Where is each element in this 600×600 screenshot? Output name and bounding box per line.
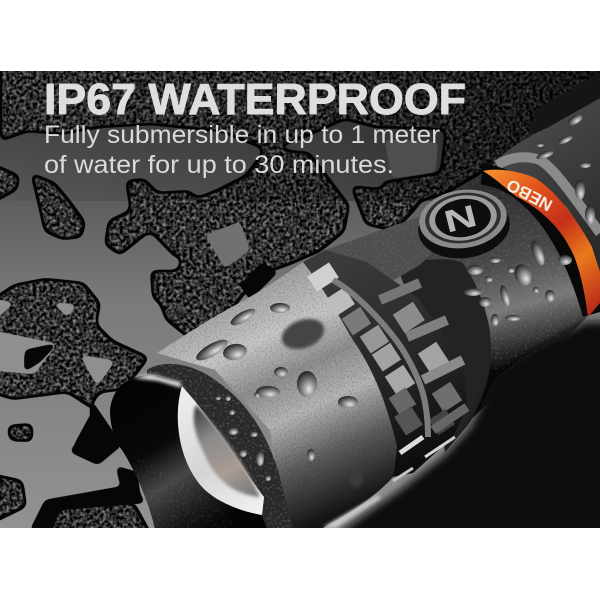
dark collar behind ribs: [395, 259, 491, 452]
power button: [414, 184, 514, 264]
puddle: top expanse: [0, 60, 600, 205]
raised grip bars: [380, 283, 467, 481]
button outer ring: [415, 184, 511, 254]
lower body reflection: [323, 495, 381, 528]
lens: [178, 386, 264, 515]
rib base: [303, 250, 467, 477]
rear tube metal band: [497, 157, 600, 233]
flashlight mid body: [420, 174, 587, 418]
puddle: bottom strip: [53, 504, 149, 528]
flashlight hood: [110, 375, 268, 530]
title: IP67 WATERPROOF: [44, 75, 466, 124]
photo panel: [0, 60, 600, 540]
dark puddle shadows: [24, 262, 278, 535]
flashlight main body: [157, 262, 397, 528]
puddle: bottom left fleck: [0, 474, 26, 520]
button logo: N: [441, 199, 481, 240]
rear tube ridge: [528, 72, 600, 135]
water droplets on flashlight: [193, 113, 595, 487]
darkening over the upper puddle: [0, 71, 600, 201]
puddle: small left fleck: [7, 423, 33, 442]
puddle: cross shape: [104, 178, 214, 258]
water puddles: [0, 60, 600, 540]
shoulder grain: [326, 218, 430, 279]
band glow: [483, 170, 600, 317]
ribbed focus collar: [303, 250, 467, 481]
subtitle: [44, 121, 440, 179]
subtitle line 2: of water for up to 30 minutes.: [44, 151, 394, 179]
button shadow: [414, 190, 514, 264]
dark lower right shadow: [335, 322, 600, 535]
bezel bright rim: [133, 374, 182, 388]
hood grain: [133, 458, 235, 528]
surface islands in puddles: [0, 140, 438, 386]
button metal ring: [422, 188, 504, 248]
button face: [433, 195, 493, 241]
orange NEBO band: [482, 170, 600, 317]
button light ring: [426, 191, 500, 245]
lens inner reflection: [194, 405, 260, 497]
wet surface background: [0, 121, 600, 528]
flashlight rear tube: [492, 72, 600, 272]
main body grain: [157, 262, 397, 528]
mid body grain: [428, 174, 584, 374]
puddle: oval above head: [150, 270, 232, 310]
subtitle line 1: Fully submersible in up to 1 meter: [44, 121, 440, 149]
band rim shadow: [482, 174, 593, 314]
shoulder between head and button: [326, 216, 432, 280]
puddle: upper left edge: [0, 166, 20, 200]
puddle: left lobe: [30, 172, 86, 240]
grip blocks: [307, 262, 462, 436]
circumferential ring: [333, 280, 428, 437]
bezel texture: [147, 364, 293, 530]
puddle: lower left mass: [0, 278, 150, 460]
puddle: central mass: [155, 148, 350, 340]
NEBO lettering: NEBO: [503, 175, 556, 215]
bezel ring: [133, 364, 293, 530]
puddle: right of centre: [350, 185, 420, 232]
